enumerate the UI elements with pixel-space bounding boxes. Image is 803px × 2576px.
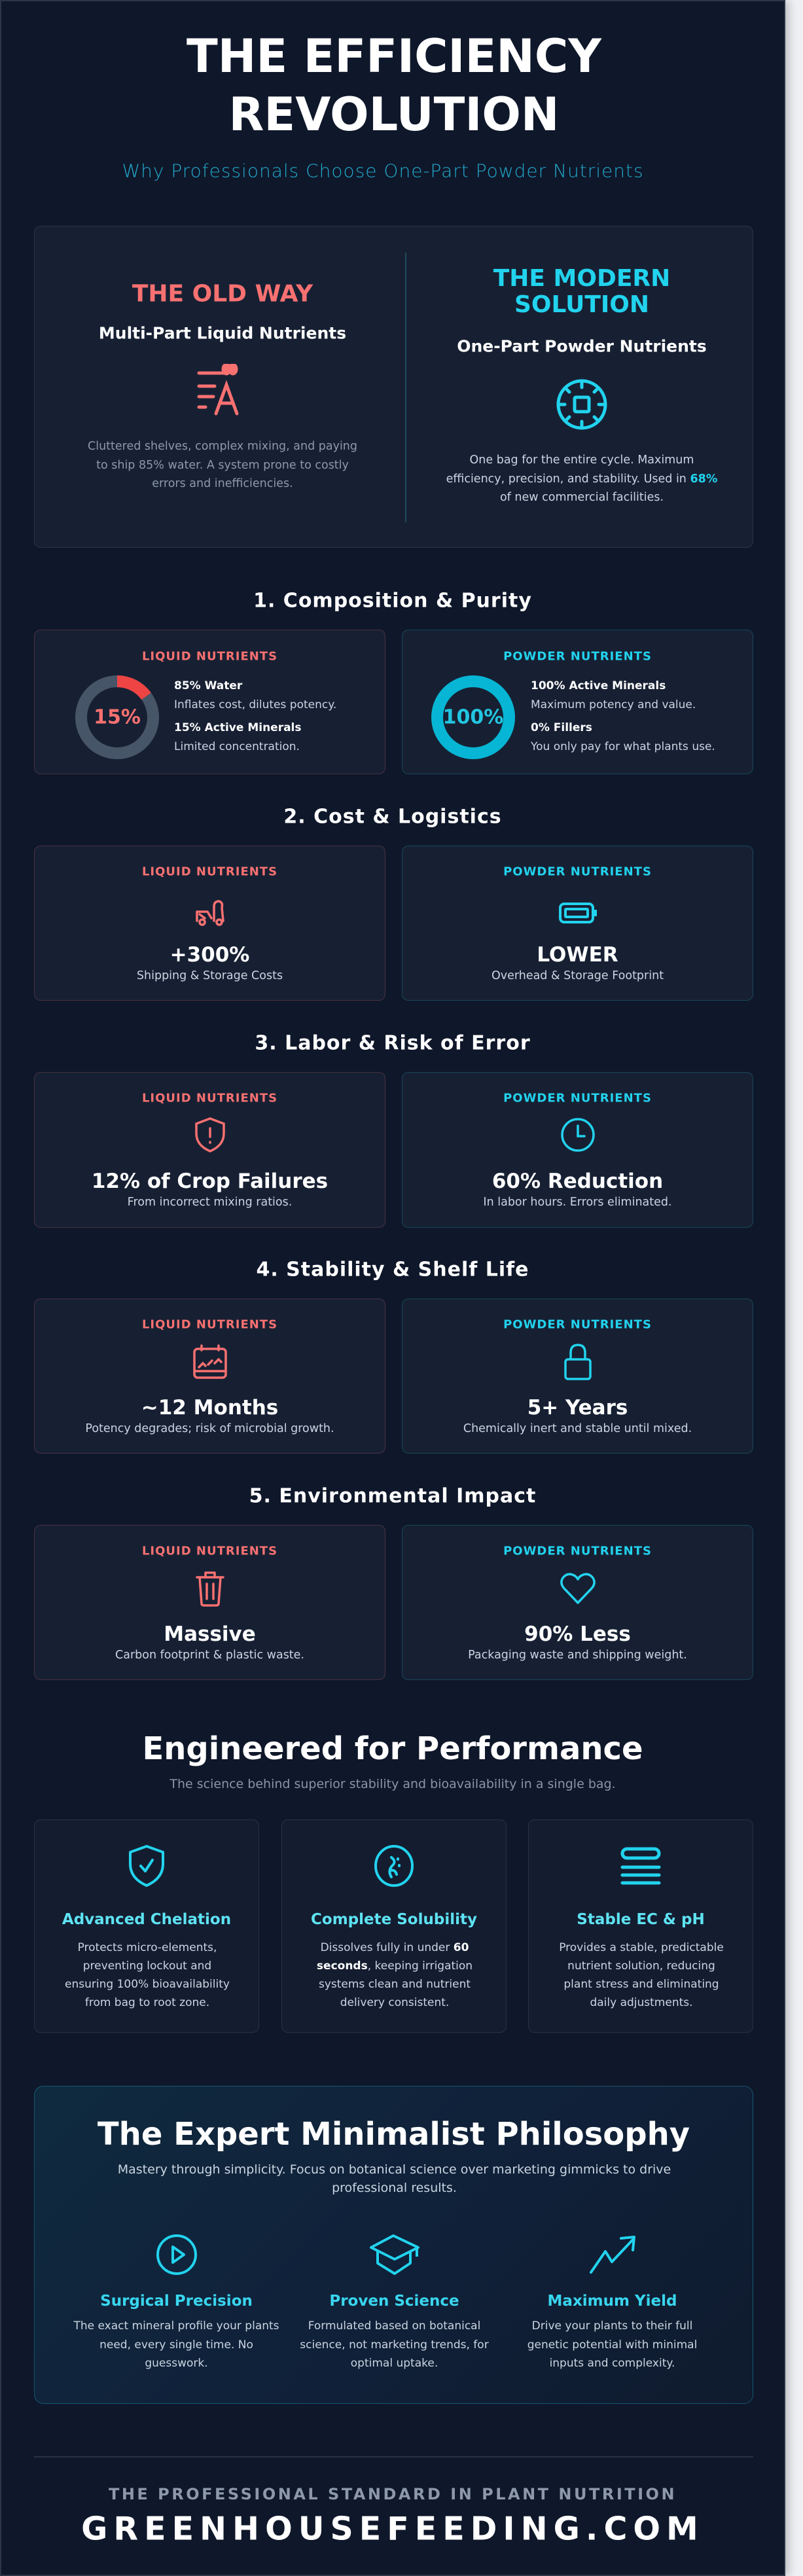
panel: liquid environment: Massive	[164, 1622, 256, 1646]
stats text: You only pay for what plants use.	[531, 740, 715, 753]
icon: calendar	[193, 1344, 227, 1379]
panel: powder labor: POWDER NUTRIENTS	[503, 1092, 652, 1105]
panel: powder environment: 90% Less	[524, 1622, 631, 1646]
panel: stable ec ph: Stable EC & pH	[577, 1911, 705, 1928]
subtitle: Why Professionals Choose One-Part Powder Nutrients	[122, 160, 644, 182]
icon: shield alert	[195, 1117, 225, 1153]
stats text: Limited concentration.	[174, 740, 300, 753]
donut chart 100%	[431, 675, 515, 759]
heading: section 2: 2. Cost & Logistics	[283, 805, 502, 829]
panel: powder cost: POWDER NUTRIENTS	[503, 865, 652, 878]
item: surgical precision: The exact mineral profile your plants need, every single time. No guesswork.	[73, 2319, 279, 2370]
title: THE EFFICIENCY	[187, 29, 601, 83]
footer website: GREENHOUSEFEEDING.COM	[81, 2511, 704, 2547]
panel: complete solubility: Dissolves fully in under 60 seconds, keeping irrigation systems clean and nutrient delivery consistent.	[317, 1941, 473, 2009]
icon: layers	[620, 1847, 661, 1885]
item: proven science	[300, 2234, 489, 2370]
heading: the old way: THE OLD WAY	[132, 280, 313, 308]
donut chart 15%: 15%	[94, 706, 141, 729]
panel: powder shelf life	[402, 1298, 753, 1454]
panel: liquid environment: Carbon footprint & plastic waste.	[115, 1649, 304, 1662]
stats text: 100% Active Minerals	[531, 679, 666, 692]
stats text: 0% Fillers	[531, 721, 592, 734]
panel: advanced chelation: Protects micro-elements, preventing lockout and ensuring 100% bioavailability from bag to root zone.	[65, 1941, 230, 2009]
icon: heart	[560, 1573, 596, 1604]
panel: liquid composition: LIQUID NUTRIENTS	[142, 649, 277, 664]
panel: powder shelf life: 5+ Years	[527, 1396, 628, 1420]
heading: modern solution	[493, 265, 670, 318]
donut chart 100%: 100%	[443, 706, 503, 729]
subheading: The science behind superior stability and bioavailability in a single bag.	[170, 1777, 616, 1791]
panel: powder environment: POWDER NUTRIENTS	[503, 1545, 652, 1558]
panel: powder shelf life: Chemically inert and stable until mixed.	[463, 1422, 692, 1435]
panel: powder cost: Overhead & Storage Footprint	[491, 969, 664, 982]
panel: powder cost	[402, 846, 753, 1001]
item: maximum yield	[527, 2236, 697, 2370]
stats text	[531, 679, 715, 753]
icon: play	[156, 2234, 197, 2275]
icon: cluttered	[198, 364, 238, 415]
heading: section 3: 3. Labor & Risk of Error	[255, 1031, 531, 1055]
heading: section 1: 1. Composition & Purity	[253, 589, 532, 613]
item: surgical precision	[73, 2234, 279, 2370]
item: proven science: Formulated based on botanical science, not marketing trends, for optimal uptake.	[300, 2319, 489, 2370]
icon: dissolve	[374, 1845, 414, 1887]
panel: liquid labor	[34, 1072, 385, 1228]
panel: complete solubility	[281, 1819, 507, 2033]
heading: modern solution: SOLUTION	[514, 291, 649, 318]
panel: complete solubility: Complete Solubility	[311, 1911, 477, 1928]
subtitle: Mastery through simplicity. Focus on botanical science over marketing gimmicks to drive professional results.	[118, 2162, 671, 2195]
modern column	[446, 265, 717, 504]
subheading: Multi-Part Liquid Nutrients	[99, 323, 346, 343]
panel: liquid composition	[34, 630, 385, 774]
icon: shield check	[129, 1845, 164, 1887]
icon: truck	[196, 900, 224, 926]
stats text: Maximum potency and value.	[531, 698, 696, 711]
item: surgical precision: Surgical Precision	[100, 2293, 253, 2310]
title: REVOLUTION	[228, 88, 559, 141]
panel: powder shelf life: POWDER NUTRIENTS	[503, 1318, 652, 1331]
panel: liquid environment	[34, 1525, 385, 1680]
panel: stable ec ph	[528, 1819, 753, 2033]
heading: The Expert Minimalist Philosophy	[98, 2116, 690, 2153]
panel: liquid shelf life: Potency degrades; risk of microbial growth.	[85, 1422, 334, 1435]
panel: powder labor	[402, 1072, 753, 1228]
heading: section 5: 5. Environmental Impact	[249, 1484, 536, 1508]
panel: powder labor: In labor hours. Errors eliminated.	[483, 1196, 672, 1209]
panel: powder environment	[402, 1525, 753, 1680]
description: One bag for the entire cycle. Maximum efficiency, precision, and stability. Used in 68% of new commercial facilities.	[446, 454, 717, 504]
donut chart 15%	[75, 675, 159, 759]
panel: powder cost: LOWER	[537, 943, 618, 967]
panel: powder composition: POWDER NUTRIENTS	[503, 649, 652, 664]
footer tagline: THE PROFESSIONAL STANDARD IN PLANT NUTRITION	[109, 2485, 677, 2503]
stats text: 85% Water	[174, 679, 242, 692]
icon: battery	[559, 903, 597, 923]
item: proven science: Proven Science	[329, 2293, 459, 2310]
panel: liquid labor: LIQUID NUTRIENTS	[142, 1092, 277, 1105]
description: Cluttered shelves, complex mixing, and paying to ship 85% water. A system prone to costly errors and inefficiencies.	[88, 440, 357, 490]
panel: powder composition	[402, 630, 753, 774]
panel: old vs modern	[34, 226, 753, 548]
icon: trend up	[589, 2236, 635, 2274]
heading: section 4: 4. Stability & Shelf Life	[256, 1258, 529, 1281]
panel: advanced chelation: Advanced Chelation	[62, 1911, 231, 1928]
panel: liquid environment: LIQUID NUTRIENTS	[142, 1545, 277, 1558]
panel: liquid cost: +300%	[170, 943, 249, 967]
icon: gear chip	[556, 380, 607, 429]
panel: powder environment: Packaging waste and shipping weight.	[468, 1649, 687, 1662]
icon: trash	[196, 1571, 224, 1607]
icon: clock	[561, 1118, 595, 1152]
panel: liquid shelf life	[34, 1298, 385, 1454]
panel: liquid shelf life: ~12 Months	[141, 1396, 278, 1420]
old way column	[88, 280, 357, 490]
subheading: One-Part Powder Nutrients	[457, 336, 707, 356]
icon: lock	[564, 1344, 592, 1380]
heading: modern solution: THE MODERN	[493, 265, 670, 292]
panel: liquid cost	[34, 846, 385, 1001]
panel: liquid labor: 12% of Crop Failures	[92, 1170, 328, 1193]
panel: advanced chelation	[34, 1819, 259, 2033]
panel: liquid cost: LIQUID NUTRIENTS	[142, 865, 277, 878]
panel: liquid labor: From incorrect mixing ratios.	[128, 1196, 292, 1209]
panel: liquid shelf life: LIQUID NUTRIENTS	[142, 1318, 277, 1331]
title	[187, 29, 602, 141]
heading: engineered for performance: Engineered for Performance	[142, 1730, 643, 1767]
panel: expert minimalist philosophy	[34, 2086, 753, 2404]
item: maximum yield: Drive your plants to their full genetic potential with minimal inputs and complexity.	[527, 2319, 697, 2370]
panel: powder labor: 60% Reduction	[492, 1170, 663, 1193]
panel: liquid cost: Shipping & Storage Costs	[137, 969, 283, 982]
stats text: Inflates cost, dilutes potency.	[174, 698, 336, 711]
item: maximum yield: Maximum Yield	[548, 2293, 677, 2310]
icon: graduation cap	[369, 2234, 420, 2275]
panel: stable ec ph: Provides a stable, predictable nutrient solution, reducing plant stress and eliminating daily adjustments.	[559, 1941, 724, 2009]
stats text: 15% Active Minerals	[174, 721, 302, 734]
stats text	[174, 679, 336, 753]
